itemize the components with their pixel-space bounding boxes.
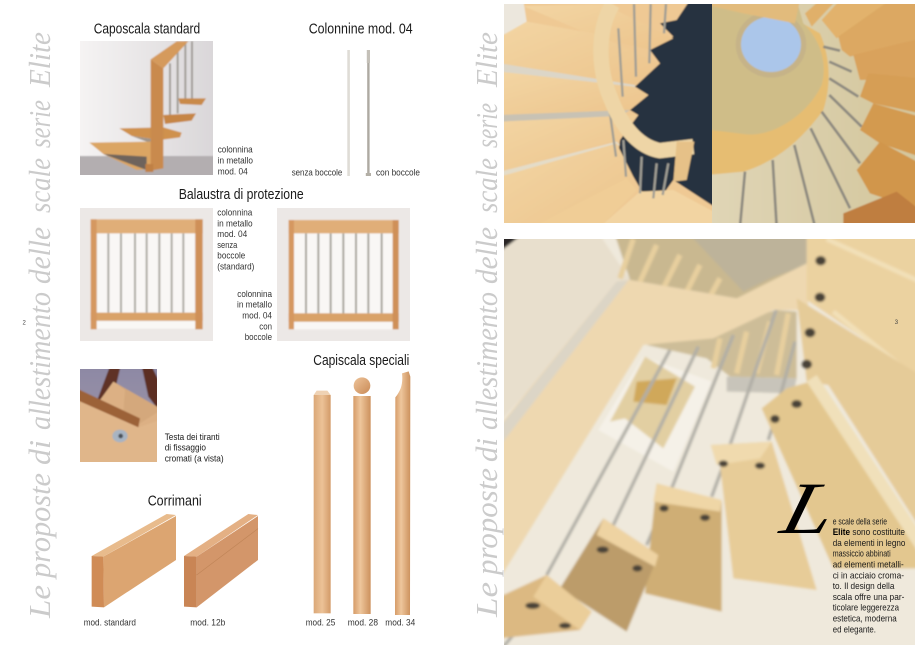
vertical title: right page: Elite	[469, 32, 504, 88]
photo: chrome bolt head	[80, 369, 157, 462]
column without bushings	[347, 50, 350, 176]
caption: colonnina in metallo: mod. 04	[218, 166, 248, 177]
caption: without bushings: colonnina	[217, 208, 253, 219]
text block: intro paragraph: to. Il design della	[833, 581, 895, 592]
caption: testa dei tiranti: cromati (a vista)	[165, 454, 224, 465]
heading: capiscala speciali: Capiscala speciali	[313, 352, 409, 369]
caption: colonnina in metallo: colonnina	[218, 145, 253, 156]
panel: corrimani	[84, 493, 258, 629]
drop cap L: L	[773, 467, 845, 549]
photo: spiral stair from above	[500, 0, 717, 227]
text block: intro paragraph: ed elegante.	[833, 624, 876, 635]
panel: caposcala standard	[77, 20, 253, 178]
text block: intro paragraph: ticolare leggerezza	[833, 603, 900, 614]
caption: colonnina in metallo	[218, 145, 253, 177]
heading: caposcala standard: Caposcala standard	[94, 20, 200, 38]
caption: with bushings: mod. 04	[242, 310, 272, 321]
vertical title: right page: di	[469, 438, 504, 462]
photo: balustrade without bushings	[77, 205, 217, 345]
caption: without bushings: mod. 04	[217, 229, 247, 240]
label: con boccole: con boccole	[376, 168, 420, 179]
heading: colonnine: Colonnine mod. 04	[309, 20, 413, 38]
panel: balaustra di protezione	[77, 186, 413, 345]
caption: with bushings: in metallo	[237, 300, 272, 311]
text block: intro paragraph: ad elementi metalli-	[833, 560, 904, 570]
vertical title: left page: proposte	[22, 473, 57, 580]
text block: intro paragraph: da elementi in legno	[833, 538, 905, 549]
column with bushings	[366, 50, 371, 176]
caption: without bushings	[217, 208, 254, 272]
vertical title: right page: delle	[469, 227, 504, 284]
panel: colonnine mod. 04	[292, 20, 420, 179]
label: mod. 12b: mod. 12b	[190, 618, 225, 629]
caption: without bushings: senza	[217, 240, 238, 251]
caption: testa dei tiranti: di fissaggio	[165, 443, 206, 454]
vertical title: left page: allestimento	[22, 292, 57, 430]
vertical title: right page	[469, 32, 504, 618]
heading: balaustra: Balaustra di protezione	[179, 186, 304, 203]
newel mod. 34	[395, 371, 410, 615]
panel: capiscala speciali	[306, 352, 415, 629]
caption: without bushings: boccole	[217, 251, 245, 262]
vertical title: left page: scale	[22, 158, 57, 213]
labels: models: mod. 34	[385, 618, 415, 629]
text block: intro paragraph: massiccio abbinati	[833, 549, 891, 560]
newel mod. 25	[314, 391, 331, 613]
vertical title: left page	[22, 32, 57, 619]
text block: intro paragraph: e scale della serie	[833, 516, 887, 527]
caption: testa dei tiranti: Testa dei tiranti	[165, 432, 220, 443]
text block: intro paragraph: estetica, moderna	[833, 614, 897, 624]
labels: models: mod. 28	[348, 618, 378, 629]
caption: with bushings	[237, 289, 273, 343]
photo: balustrade with bushings	[273, 205, 413, 345]
vertical title: right page: Le	[469, 582, 504, 618]
caption: colonnina in metallo: in metallo	[218, 155, 253, 166]
text block: intro paragraph	[833, 516, 905, 635]
caption: with bushings: colonnina	[237, 289, 273, 300]
photo: skylight and stair seen from below	[707, 0, 920, 227]
vertical title: left page: serie	[22, 100, 57, 148]
caption: with bushings: con	[259, 321, 272, 332]
caption: testa dei tiranti	[165, 432, 224, 465]
label: senza boccole: senza boccole	[292, 168, 342, 179]
vertical title: left page: delle	[22, 227, 57, 284]
vertical title: left page: di	[22, 440, 57, 465]
handrail mod. standard	[92, 514, 176, 607]
vertical title: left page: Le	[22, 585, 57, 619]
heading: corrimani: Corrimani	[148, 493, 202, 510]
vertical title: right page: scale	[469, 158, 504, 213]
newel mod. 28	[353, 377, 371, 614]
text block: intro paragraph: ci in acciaio croma-	[833, 570, 904, 581]
text block: intro paragraph: Elite sono costituite	[833, 527, 905, 538]
photo: staircase newel	[77, 38, 217, 178]
caption: without bushings: in metallo	[217, 218, 253, 229]
panel: testa dei tiranti	[77, 366, 224, 465]
caption: without bushings: (standard)	[217, 261, 254, 272]
labels: models: mod. 25	[306, 618, 335, 629]
text block: intro paragraph: scala offre una par-	[833, 592, 904, 603]
page number 2: 2	[22, 320, 26, 326]
handrail mod. 12b	[184, 514, 258, 607]
photo: main stair view	[500, 235, 920, 648]
caption: with bushings: boccole	[245, 332, 272, 343]
vertical title: right page: allestimento	[469, 292, 504, 430]
vertical title: right page: proposte	[469, 468, 504, 577]
vertical title: right page: serie	[469, 103, 504, 148]
vertical title: left page: Elite	[22, 32, 57, 88]
page number 3: 3	[895, 320, 899, 326]
labels: models	[306, 618, 415, 629]
label: mod. standard: mod. standard	[84, 618, 136, 629]
